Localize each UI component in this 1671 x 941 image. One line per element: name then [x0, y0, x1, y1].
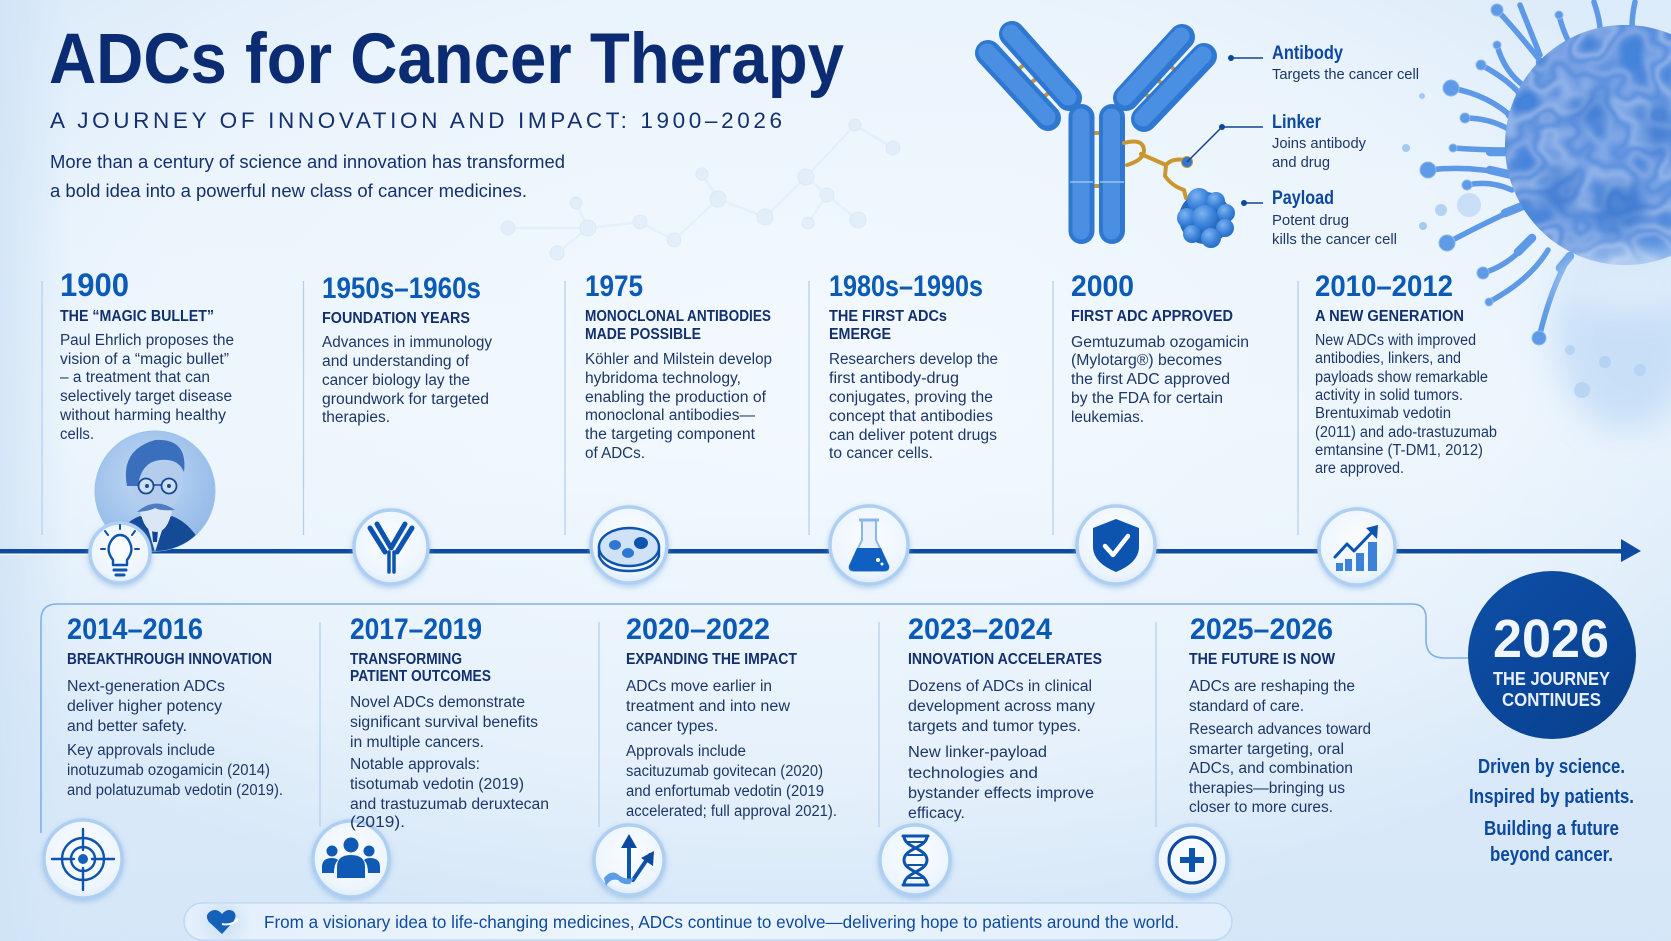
callout: 2026 the journey continues: [1468, 571, 1636, 739]
callout: 2026 the journey continues: CONTINUES: [1502, 689, 1601, 710]
body: vision of a “magic bullet”: [60, 351, 229, 368]
body: Next-generation ADCs: [67, 678, 225, 695]
panel: 2014-2016: [44, 613, 283, 898]
body: Researchers develop the: [829, 351, 998, 368]
icon: expanding arrows: [594, 825, 664, 895]
heading: BREAKTHROUGH INNOVATION: [67, 651, 272, 668]
body: cells.: [60, 426, 94, 443]
body: payloads show remarkable: [1315, 369, 1488, 386]
heading: FIRST ADC APPROVED: [1071, 308, 1233, 325]
heading: [829, 308, 947, 343]
body: New ADCs with improved: [1315, 332, 1476, 349]
illustration: cancer cell: [1402, 2, 1671, 430]
component labels: Linker: [1272, 112, 1322, 133]
body: and understanding of: [322, 353, 470, 370]
icon: flask: [830, 506, 908, 584]
icon: medical plus: [1157, 825, 1227, 895]
body: [350, 694, 549, 831]
body: bystander effects improve: [908, 785, 1094, 802]
body: can deliver potent drugs: [829, 427, 997, 444]
title: ADCs for Cancer Therapy: [49, 20, 844, 99]
year: 2000: [1071, 270, 1134, 303]
year: 1975: [585, 270, 643, 303]
heading: INNOVATION ACCELERATES: [908, 651, 1102, 668]
panel: 1980s-1990s: [829, 270, 998, 584]
body: Approvals include: [626, 743, 746, 760]
body: emtansine (T-DM1, 2012): [1315, 442, 1483, 459]
illustration: antibody-drug conjugate: [987, 33, 1235, 248]
heading: [585, 308, 771, 343]
year: 2023–2024: [908, 613, 1052, 646]
body: monoclonal antibodies—: [585, 407, 755, 424]
heading: TRANSFORMING: [350, 651, 462, 668]
linker: [1124, 142, 1192, 198]
body: Advances in immunology: [322, 334, 492, 351]
heading: A NEW GENERATION: [1315, 308, 1464, 325]
payload cluster: [1177, 188, 1235, 248]
body: deliver higher potency: [67, 698, 222, 715]
body: [1315, 332, 1497, 477]
heading: MADE POSSIBLE: [585, 326, 701, 343]
body: and better safety.: [67, 718, 187, 735]
body: [1071, 334, 1249, 426]
closing statement: [1469, 756, 1634, 866]
body: Gemtuzumab ozogamicin: [1071, 334, 1249, 351]
intro text: a bold idea into a powerful new class of cancer medicines.: [50, 180, 527, 201]
year: 2025–2026: [1190, 613, 1333, 646]
body: the targeting component: [585, 426, 756, 443]
body: [908, 678, 1095, 822]
body: selectively target disease: [60, 388, 232, 405]
closing statement: beyond cancer.: [1490, 844, 1613, 866]
portrait: Paul Ehrlich: [95, 431, 215, 560]
body: – a treatment that can: [60, 369, 210, 386]
icon: target: [44, 820, 122, 898]
lower panel frame and connector: [41, 604, 1470, 833]
body: Novel ADCs demonstrate: [350, 694, 525, 711]
body: without harming healthy: [59, 407, 226, 424]
heading: THE “MAGIC BULLET”: [60, 308, 214, 325]
panel: 1950s-1960s: [322, 272, 492, 584]
body: therapies—bringing us: [1189, 780, 1345, 797]
body: (2019).: [350, 814, 405, 831]
body: concept that antibodies: [829, 408, 993, 425]
body: of ADCs.: [585, 445, 645, 462]
body: Research advances toward: [1189, 721, 1371, 738]
closing statement: Driven by science.: [1478, 756, 1625, 778]
body: Paul Ehrlich proposes the: [60, 332, 234, 349]
timeline arrow: [0, 539, 1641, 562]
icon: DNA: [880, 825, 950, 895]
body: to cancer cells.: [829, 445, 933, 462]
body: cancer types.: [626, 718, 718, 735]
body: treatment and into new: [626, 698, 791, 715]
body: (Mylotarg®) becomes: [1071, 352, 1222, 369]
body: efficacy.: [908, 805, 965, 822]
body: development across many: [908, 698, 1095, 715]
body: Key approvals include: [67, 742, 215, 759]
component labels: Joins antibody: [1272, 135, 1366, 152]
icon: antibody: [354, 510, 428, 584]
heading: EMERGE: [829, 326, 891, 343]
body: conjugates, proving the: [829, 389, 993, 406]
body: [322, 334, 492, 426]
body: are approved.: [1315, 460, 1404, 477]
body: activity in solid tumors.: [1315, 387, 1463, 404]
body: significant survival benefits: [350, 714, 538, 731]
panel: 2000: [1071, 270, 1249, 584]
component labels: and drug: [1272, 154, 1330, 171]
body: technologies and: [908, 765, 1038, 782]
body: antibodies, linkers, and: [1315, 350, 1461, 367]
heading: MONOCLONAL ANTIBODIES: [585, 308, 771, 325]
icon: petri dish: [591, 507, 667, 583]
body: Köhler and Milstein develop: [585, 351, 772, 368]
dividers: [42, 281, 1298, 827]
panel: 2023-2024: [880, 613, 1102, 895]
body: [59, 332, 234, 443]
year: 2020–2022: [626, 613, 770, 646]
body: Notable approvals:: [350, 756, 480, 773]
body: standard of care.: [1189, 698, 1304, 715]
body: ADCs, and combination: [1189, 760, 1353, 777]
body: [1189, 678, 1371, 816]
year: 2014–2016: [67, 613, 203, 646]
body: ADCs are reshaping the: [1189, 678, 1355, 695]
body: targets and tumor types.: [908, 718, 1081, 735]
body: first antibody-drug: [829, 370, 959, 387]
body: [829, 351, 998, 462]
panel: 2020-2022: [594, 613, 837, 895]
year: 1980s–1990s: [829, 270, 983, 303]
closing statement: Building a future: [1484, 818, 1619, 840]
heading: FOUNDATION YEARS: [322, 310, 470, 327]
body: and polatuzumab vedotin (2019).: [67, 782, 283, 799]
year: 2017–2019: [350, 613, 482, 646]
body: New linker-payload: [908, 744, 1047, 761]
icon: lightbulb: [90, 523, 150, 583]
body: sacituzumab govitecan (2020): [626, 763, 823, 780]
icon: heart in hand: [203, 902, 243, 941]
panel: 1975: [585, 270, 772, 583]
footer banner: [184, 902, 1232, 941]
body: ADCs move earlier in: [626, 678, 772, 695]
heading: PATIENT OUTCOMES: [350, 668, 491, 685]
panel: 2025-2026: [1157, 613, 1371, 895]
component labels: [1187, 43, 1419, 248]
decorative molecule network: [501, 119, 900, 260]
footer message: From a visionary idea to life-changing medicines, ADCs continue to evolve—delivering hope to patients around the world.: [264, 912, 1179, 932]
component labels: Potent drug: [1272, 212, 1349, 229]
body: [626, 678, 837, 820]
body: by the FDA for certain: [1071, 390, 1223, 407]
panel: 1900: [59, 267, 234, 583]
body: Brentuximab vedotin: [1315, 405, 1451, 422]
body: enabling the production of: [585, 389, 767, 406]
component labels: kills the cancer cell: [1272, 231, 1397, 248]
body: the first ADC approved: [1071, 371, 1230, 388]
body: and trastuzumab deruxtecan: [350, 796, 549, 813]
intro text: More than a century of science and innovation has transformed: [50, 151, 565, 172]
closing statement: Inspired by patients.: [1469, 786, 1634, 808]
body: smarter targeting, oral: [1189, 741, 1344, 758]
body: therapies.: [322, 409, 390, 426]
body: [67, 678, 283, 799]
year: 2010–2012: [1315, 270, 1453, 303]
body: groundwork for targeted: [322, 391, 489, 408]
body: [585, 351, 772, 462]
year: 1950s–1960s: [322, 272, 481, 305]
body: tisotumab vedotin (2019): [350, 776, 524, 793]
body: in multiple cancers.: [350, 734, 484, 751]
year: 1900: [60, 267, 129, 303]
heading: [350, 651, 491, 685]
icon: people: [313, 821, 389, 897]
icon: growth chart: [1319, 509, 1395, 585]
body: cancer biology lay the: [322, 372, 470, 389]
panel: 2010-2012: [1315, 270, 1497, 585]
heading: THE FUTURE IS NOW: [1189, 651, 1335, 668]
body: inotuzumab ozogamicin (2014): [67, 762, 270, 779]
callout: 2026 the journey continues: 2026: [1493, 609, 1609, 669]
body: (2011) and ado-trastuzumab: [1315, 424, 1497, 441]
callout: 2026 the journey continues: THE JOURNEY: [1493, 668, 1611, 689]
body: and enfortumab vedotin (2019: [626, 783, 824, 800]
component labels: Antibody: [1272, 43, 1343, 64]
body: accelerated; full approval 2021).: [626, 803, 837, 820]
body: closer to more cures.: [1189, 799, 1333, 816]
panel: 2017-2019: [313, 613, 549, 897]
heading: EXPANDING THE IMPACT: [626, 651, 797, 668]
icon: shield: [1077, 506, 1155, 584]
intro text: [50, 151, 565, 201]
body: leukemias.: [1071, 409, 1144, 426]
body: Dozens of ADCs in clinical: [908, 678, 1092, 695]
component labels: Targets the cancer cell: [1272, 66, 1419, 83]
heading: THE FIRST ADCs: [829, 308, 947, 325]
component labels: Payload: [1272, 188, 1334, 209]
body: hybridoma technology,: [585, 370, 741, 387]
subtitle: A JOURNEY OF INNOVATION AND IMPACT: 1900–2026: [50, 108, 782, 133]
